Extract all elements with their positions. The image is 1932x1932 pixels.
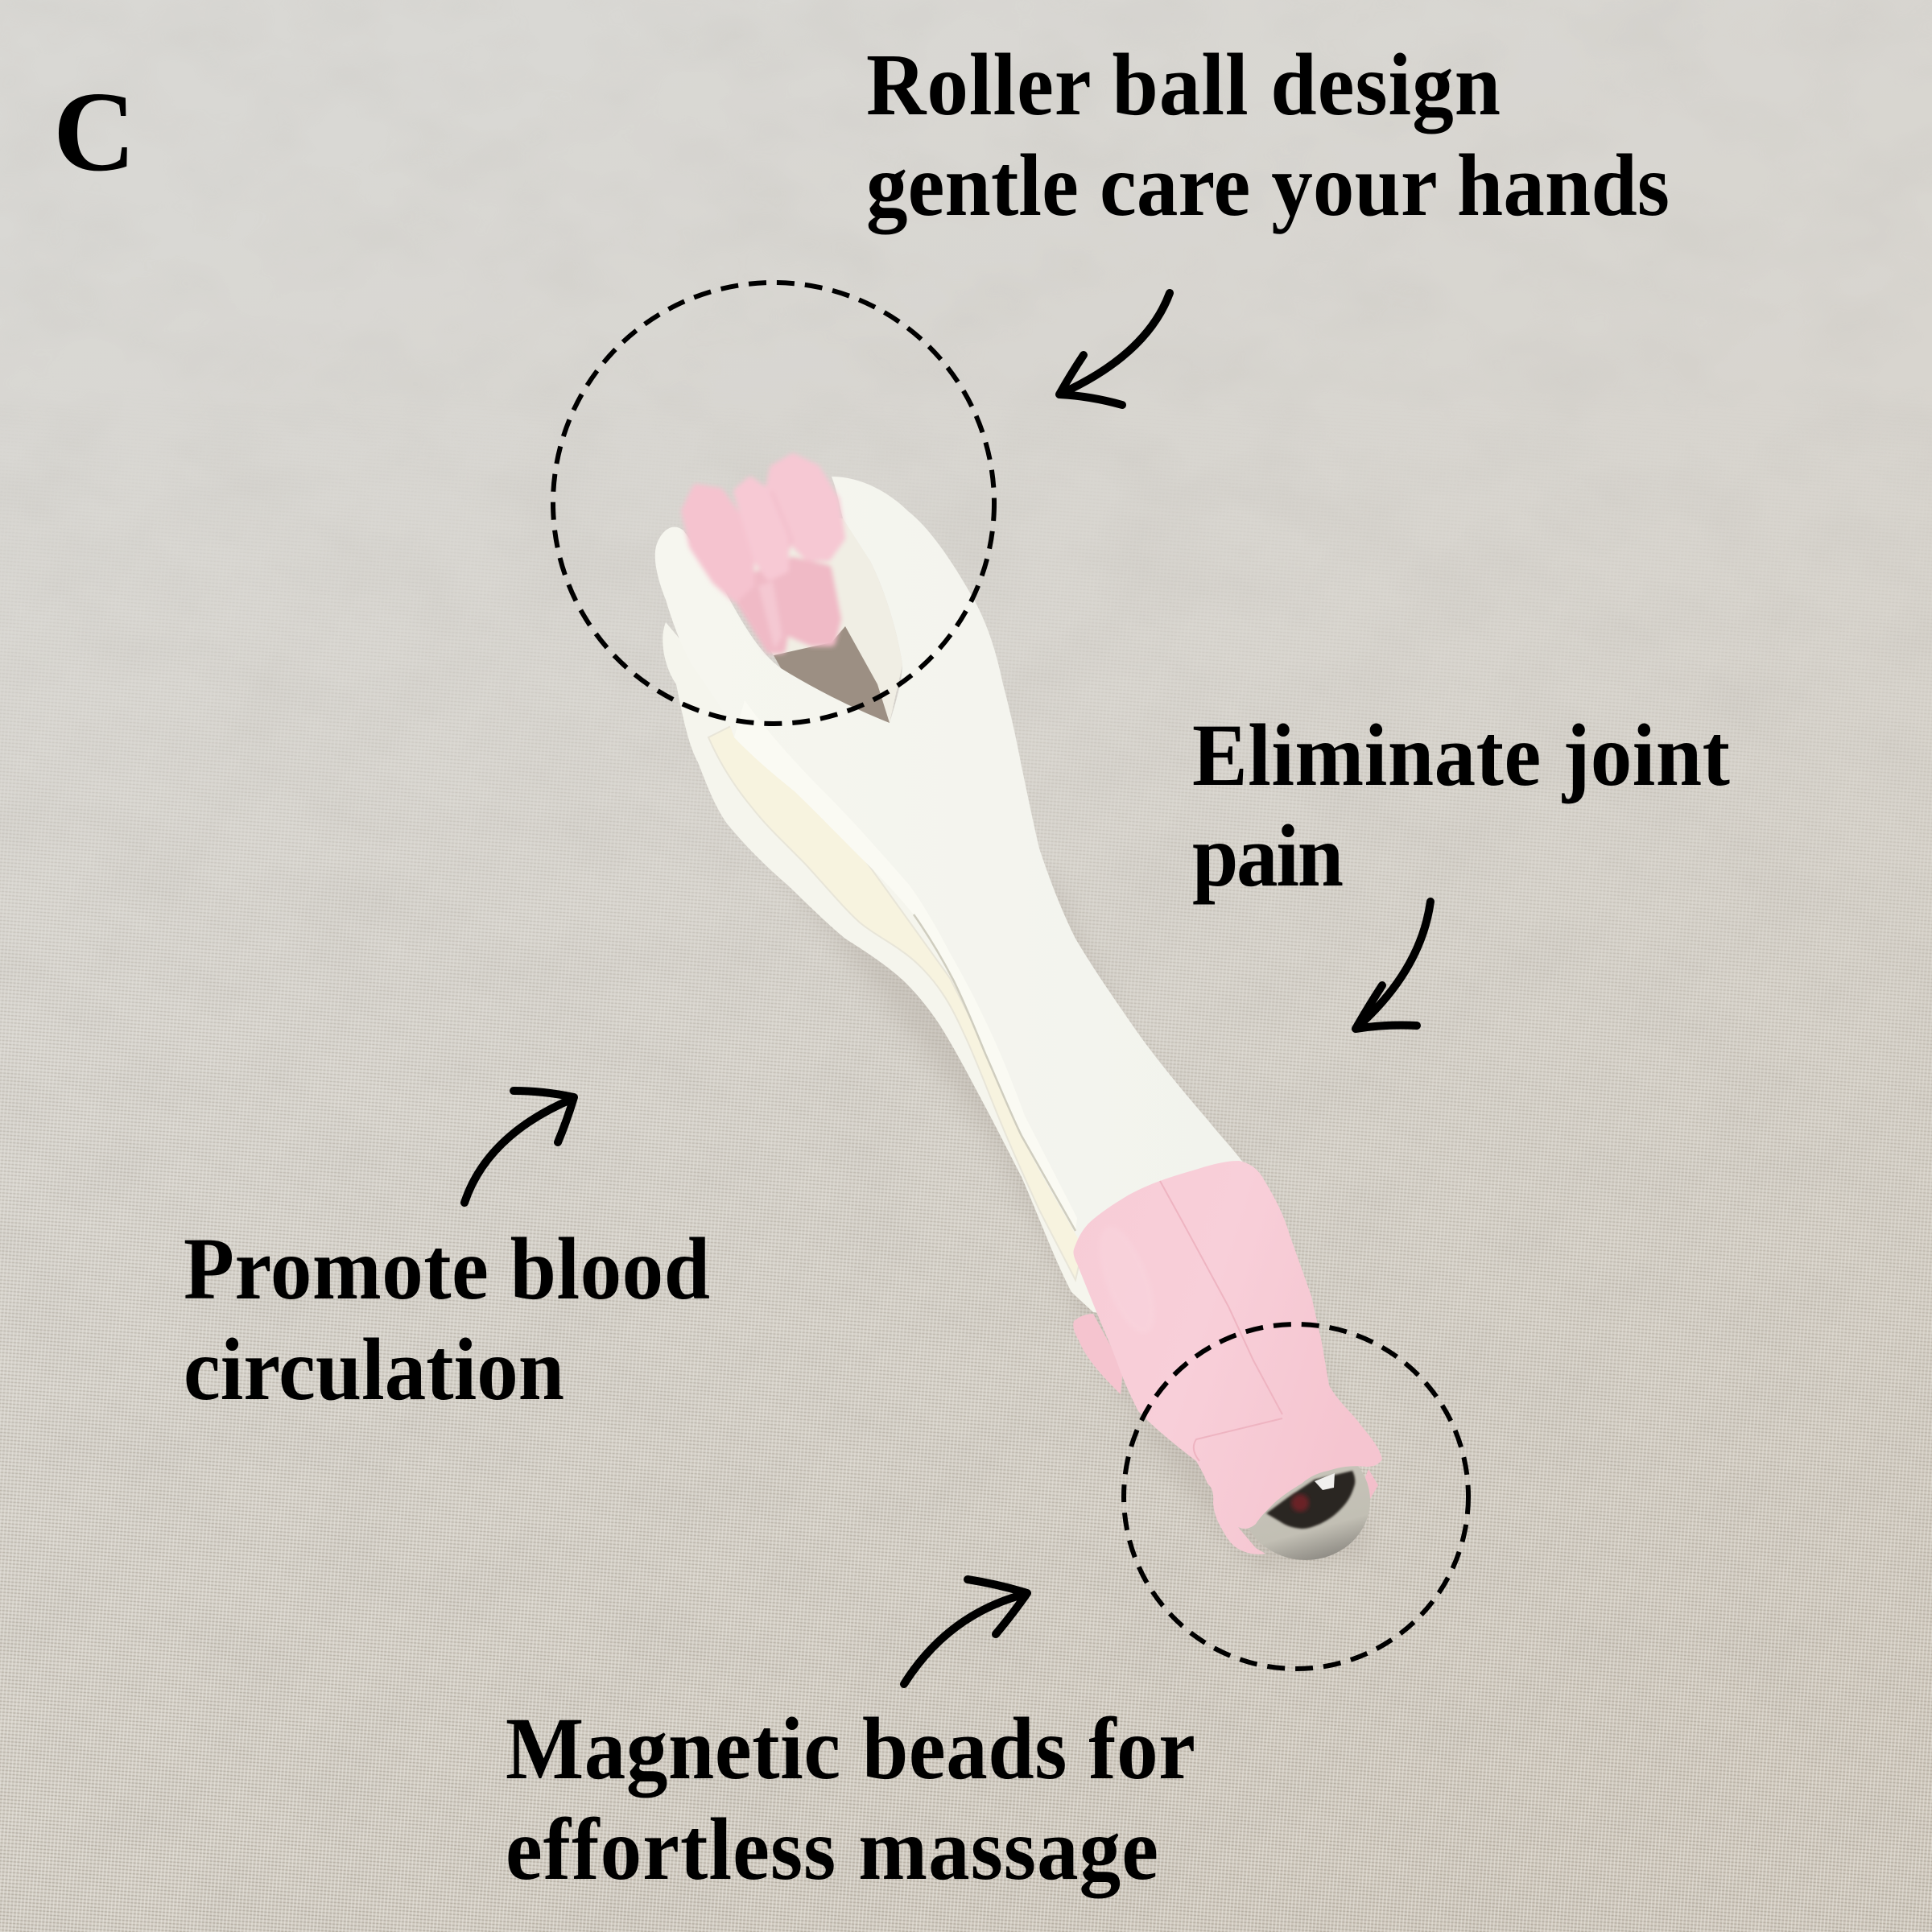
pink cap — [1073, 1161, 1382, 1554]
soft shadow — [692, 724, 1368, 1570]
arrow: blood — [464, 1091, 574, 1203]
chrome ball — [1241, 1441, 1378, 1560]
text: eliminate joint pain: Eliminate joint — [1192, 707, 1730, 805]
label: C: C — [53, 68, 136, 195]
massager product — [655, 457, 1382, 1570]
pink tab — [1073, 1314, 1123, 1394]
text: promote blood circulation: circulation — [184, 1321, 564, 1419]
back inner cream stripe — [708, 724, 1087, 1280]
front body rim — [734, 700, 1077, 1231]
arrow: roller — [1059, 293, 1170, 405]
text: eliminate joint pain: pain — [1192, 807, 1344, 906]
text: roller ball design: gentle care your hands — [866, 137, 1670, 235]
front handle piece — [655, 477, 1244, 1240]
text: magnetic beads: Magnetic beads for — [506, 1700, 1195, 1798]
dashed circle: roller — [553, 283, 994, 724]
text: magnetic beads: effortless massage — [506, 1801, 1158, 1899]
text: promote blood circulation: Promote blood — [184, 1220, 710, 1319]
arrow: magnetic — [904, 1579, 1027, 1684]
front edge line — [914, 914, 1075, 1231]
back handle piece — [663, 622, 1143, 1320]
text: roller ball design: Roller ball design — [866, 36, 1501, 134]
roller opening — [724, 515, 902, 723]
dashed circle: ball — [1124, 1324, 1468, 1669]
pink rollers — [685, 457, 841, 650]
cap highlight — [1088, 1220, 1166, 1340]
arrow: joint — [1356, 902, 1430, 1029]
cap seam — [1160, 1181, 1282, 1461]
